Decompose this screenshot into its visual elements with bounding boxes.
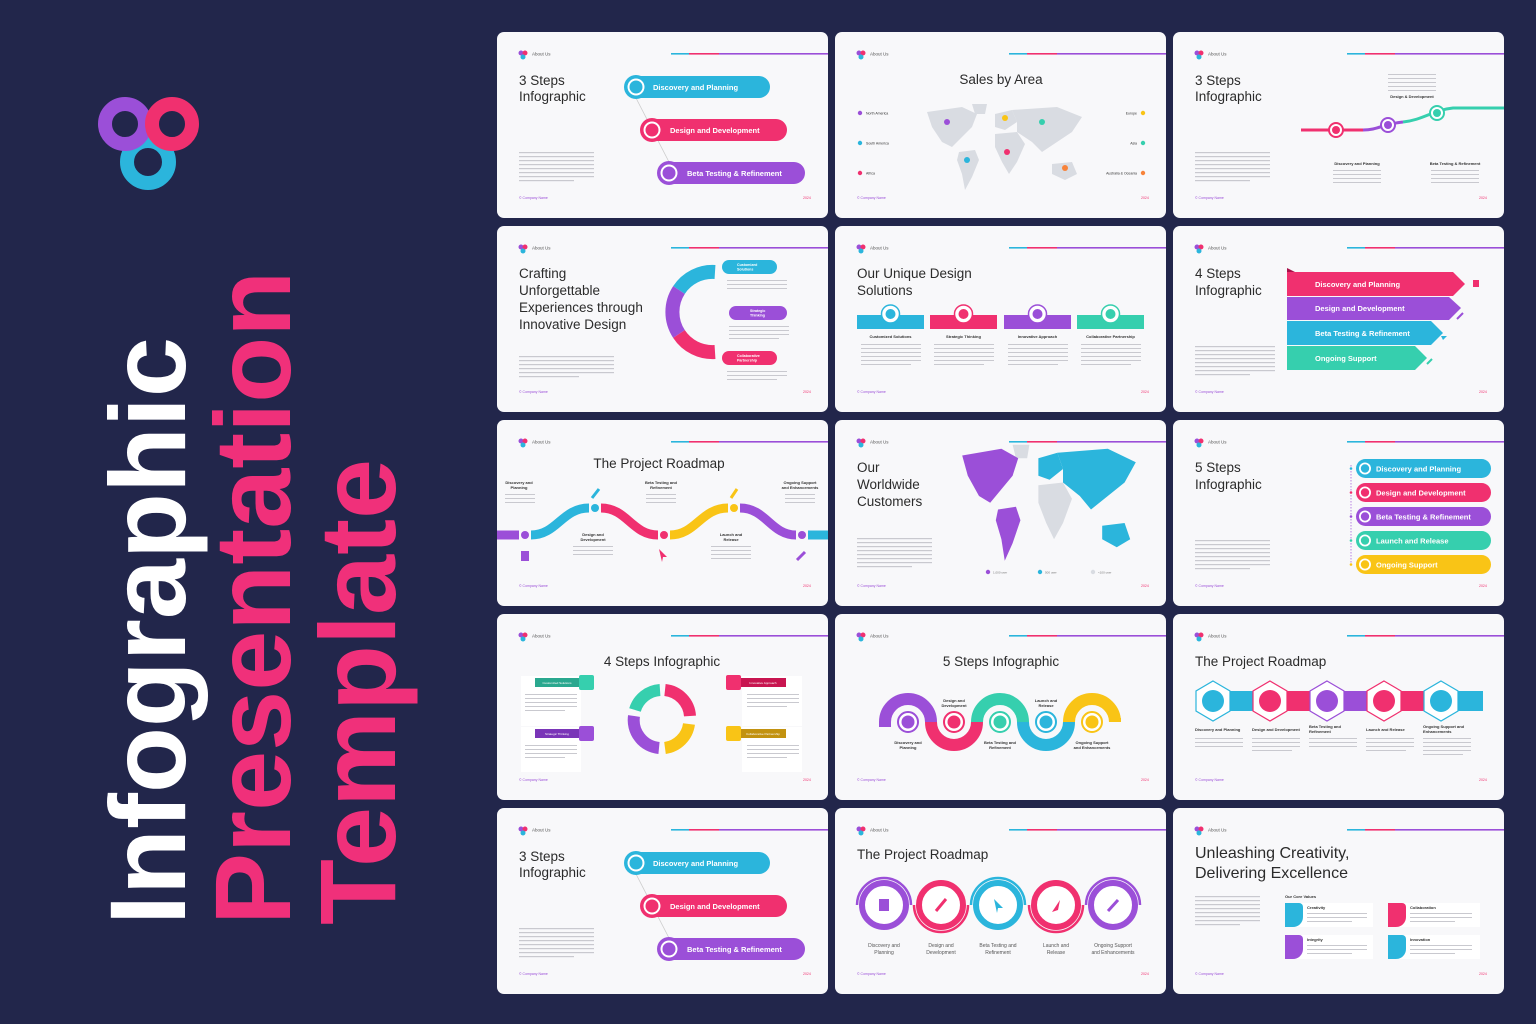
slide: 3 steps (row1): About Us	[532, 52, 551, 56]
slide: 4 steps donut	[497, 614, 828, 800]
slide: crafting half ring: Partnership	[737, 358, 758, 362]
slide: 3 steps (row5): Design and Development	[670, 902, 760, 911]
slide: unleashing creativity: Our Core Values	[1285, 894, 1317, 899]
slide: 5 steps pills: Beta Testing & Refinement	[1376, 512, 1471, 522]
slide: roadmap circles: Release	[1047, 950, 1065, 956]
slide: unleashing creativity: Innovation	[1410, 937, 1431, 942]
slide: crafting half ring: Innovative Design	[519, 317, 626, 332]
slide: unleashing creativity: Unleashing Creativity,	[1195, 845, 1349, 862]
logo	[105, 104, 192, 183]
slide: roadmap circles	[835, 808, 1166, 994]
slide: unleashing creativity: Delivering Excellence	[1195, 865, 1348, 882]
slide: roadmap hexagons: About Us	[1208, 634, 1227, 638]
slide: unique design solutions: © Company Name	[857, 390, 886, 394]
slide: 5 steps arcs: Ongoing Support	[1076, 740, 1109, 745]
slide: 5 steps pills: Infographic	[1195, 477, 1262, 492]
slide: 3 steps wave: Design & Development	[1390, 94, 1434, 99]
slide: unique design solutions: Solutions	[857, 283, 913, 298]
slide: 5 steps pills: © Company Name	[1195, 584, 1224, 588]
slide: project roadmap wave: Design and	[582, 532, 604, 537]
slide: 3 steps (row1): Infographic	[519, 89, 586, 104]
slide: 5 steps pills: Design and Development	[1376, 488, 1466, 498]
slide: sales by area: Asia	[1130, 142, 1137, 146]
slide: project roadmap wave: © Company Name	[519, 584, 548, 588]
slide: 3 steps (row1): Discovery and Planning	[653, 83, 738, 92]
slide: unleashing creativity: Collaboration	[1410, 905, 1436, 910]
slide: 3 steps wave: About Us	[1208, 52, 1227, 56]
slide: 5 steps arcs: About Us	[870, 634, 889, 638]
slide: sales by area: Australia & Oceania	[1106, 172, 1137, 176]
slide: 3 steps (row1)	[497, 32, 828, 218]
slide: 3 steps (row1): Beta Testing & Refinement	[687, 169, 782, 178]
title: Template: Template	[297, 459, 418, 925]
slide: project roadmap wave	[497, 420, 828, 606]
slide: 4 steps donut: About Us	[532, 634, 551, 638]
slide: 5 steps arcs: Beta Testing and	[984, 740, 1017, 745]
slide: 3 steps (row5)	[497, 808, 828, 994]
slide: crafting half ring	[497, 226, 828, 412]
slide: roadmap circles: Launch and	[1043, 943, 1069, 949]
slide: roadmap hexagons: 2024	[1479, 778, 1487, 782]
slide: 5 steps arcs: Development	[941, 703, 967, 708]
slide: roadmap circles: © Company Name	[857, 972, 886, 976]
slide: 4 steps arrows: Design and Development	[1315, 304, 1405, 313]
slide: crafting half ring: Customized	[737, 263, 757, 267]
slide: 4 steps donut: 2024	[803, 778, 811, 782]
slide: 3 steps (row5): Infographic	[519, 865, 586, 880]
slide: unique design solutions: Collaborative Partnership	[1086, 334, 1135, 339]
slide: roadmap circles: Beta Testing and	[979, 943, 1017, 949]
slide: 5 steps pills	[1173, 420, 1504, 606]
slide: project roadmap wave: Ongoing Support	[784, 480, 817, 485]
slide: project roadmap wave: Release	[723, 537, 739, 542]
slide: crafting half ring: Strategic	[750, 309, 765, 313]
slide: crafting half ring: 2024	[803, 390, 811, 394]
title: Infographic: Infographic	[87, 337, 208, 925]
slide: worldwide customers: Our	[857, 460, 880, 475]
slide: 5 steps arcs	[835, 614, 1166, 800]
slide: unleashing creativity: Creativity	[1307, 905, 1326, 910]
slide: 4 steps arrows: About Us	[1208, 246, 1227, 250]
slide: roadmap circles: Design and	[928, 943, 954, 949]
slide: project roadmap wave: Planning	[511, 485, 528, 490]
slide: 4 steps donut: Strategic Thinking	[545, 732, 569, 736]
slide: project roadmap wave: Launch and	[720, 532, 743, 537]
slide: roadmap hexagons: The Project Roadmap	[1195, 654, 1326, 669]
slide: sales by area: About Us	[870, 52, 889, 56]
left title block	[87, 97, 418, 925]
slide: roadmap circles: Development	[926, 950, 956, 956]
slide: unique design solutions	[835, 226, 1166, 412]
slide: project roadmap wave: Discovery and	[505, 480, 533, 485]
slide: project roadmap wave: Beta Testing and	[645, 480, 678, 485]
slide: 5 steps pills: 2024	[1479, 584, 1487, 588]
slide: roadmap hexagons: Discovery and Planning	[1195, 727, 1241, 732]
slide: crafting half ring: Collaborative	[737, 354, 760, 358]
slide: crafting half ring: Experiences through	[519, 300, 643, 315]
slide: sales by area: 2024	[1141, 196, 1149, 200]
slide: roadmap hexagons: Refinement	[1309, 729, 1331, 734]
slide: crafting half ring: About Us	[532, 246, 551, 250]
slide: 3 steps (row5): 2024	[803, 972, 811, 976]
slide: 3 steps (row1): © Company Name	[519, 196, 548, 200]
slide: 4 steps arrows: Infographic	[1195, 283, 1262, 298]
slide: worldwide customers: <100 user	[1098, 570, 1111, 574]
slide: unleashing creativity: 2024	[1479, 972, 1487, 976]
slide: roadmap circles: and Enhancements	[1091, 950, 1135, 956]
slide: project roadmap wave: 2024	[803, 584, 811, 588]
slide: 4 steps arrows: Discovery and Planning	[1315, 280, 1400, 289]
slide: roadmap hexagons: Beta Testing and	[1309, 724, 1341, 729]
slide: crafting half ring: Crafting	[519, 266, 566, 281]
slide: project roadmap wave: About Us	[532, 440, 551, 444]
slide: 4 steps arrows: Ongoing Support	[1315, 354, 1377, 363]
slide: crafting half ring: © Company Name	[519, 390, 548, 394]
slide: 3 steps (row5): Beta Testing & Refinement	[687, 945, 782, 954]
slide: 5 steps arcs: Planning	[900, 745, 917, 750]
slide: worldwide customers: Worldwide	[857, 477, 920, 492]
slide: roadmap circles: 2024	[1141, 972, 1149, 976]
slide: 5 steps pills: Ongoing Support	[1376, 560, 1438, 570]
slide: 3 steps (row5): © Company Name	[519, 972, 548, 976]
slide: 3 steps wave: Infographic	[1195, 89, 1262, 104]
slide: unleashing creativity: Integrity	[1307, 937, 1324, 942]
slide: project roadmap wave: Development	[580, 537, 606, 542]
slide: crafting half ring: Thinking	[750, 314, 765, 318]
slide: 4 steps arrows: Beta Testing & Refinement	[1315, 329, 1410, 338]
slide: unleashing creativity: © Company Name	[1195, 972, 1224, 976]
slide: roadmap circles: Ongoing Support	[1094, 943, 1133, 949]
slide: roadmap hexagons: Design and Development	[1252, 727, 1300, 732]
slide: unique design solutions: About Us	[870, 246, 889, 250]
slide: 3 steps (row5): 3 Steps	[519, 849, 565, 864]
slide: 5 steps arcs: Discovery and	[894, 740, 922, 745]
slide: unique design solutions: Innovative Approach	[1018, 334, 1058, 339]
slide: 4 steps arrows: © Company Name	[1195, 390, 1224, 394]
slide: 3 steps wave: Discovery and Planning	[1334, 161, 1380, 166]
slide: sales by area: © Company Name	[857, 196, 886, 200]
slide: roadmap circles: Planning	[874, 950, 894, 956]
slide: 5 steps pills: About Us	[1208, 440, 1227, 444]
slide: project roadmap wave: and Enhancements	[782, 485, 819, 490]
slide: roadmap hexagons	[1173, 614, 1504, 800]
slide: 5 steps pills: 5 Steps	[1195, 460, 1241, 475]
slide: roadmap hexagons: Launch and Release	[1366, 727, 1405, 732]
slide: 5 steps arcs: Design and	[943, 698, 965, 703]
slide: roadmap circles: Discovery and	[868, 943, 900, 949]
slide: crafting half ring: Unforgettable	[519, 283, 600, 298]
slide: worldwide customers: 1,000 user	[993, 570, 1007, 574]
slide: 5 steps arcs: 2024	[1141, 778, 1149, 782]
slide: 5 steps arcs: and Enhancements	[1074, 745, 1111, 750]
slide: sales by area: South America	[866, 142, 889, 146]
slide: 3 steps (row5): Discovery and Planning	[653, 859, 738, 868]
slide: 4 steps arrows: 2024	[1479, 390, 1487, 394]
slide: 3 steps wave: 2024	[1479, 196, 1487, 200]
slide: 5 steps arcs: Refinement	[989, 745, 1012, 750]
slide: sales by area: Africa	[866, 172, 875, 176]
title: Presentation: Presentation	[192, 271, 313, 925]
slide: 3 steps (row5): About Us	[532, 828, 551, 832]
slide: 4 steps donut: 4 Steps Infographic	[604, 654, 720, 669]
slide: worldwide customers: 2024	[1141, 584, 1149, 588]
slide: project roadmap wave: The Project Roadmap	[593, 456, 725, 471]
slide: 3 steps wave: 3 Steps	[1195, 73, 1241, 88]
slide: roadmap hexagons: Enhancements	[1423, 729, 1452, 734]
slide: roadmap circles: Refinement	[985, 950, 1011, 956]
slide: 5 steps arcs: 5 Steps Infographic	[943, 654, 1059, 669]
slide: roadmap hexagons: Ongoing Support and	[1423, 724, 1465, 729]
slide: unique design solutions: Customized Solutions	[870, 334, 912, 339]
slide: worldwide customers	[835, 420, 1166, 606]
slide: sales by area: Europe	[1126, 112, 1137, 116]
slide: sales by area	[835, 32, 1166, 218]
slide: 5 steps arcs: Launch and	[1035, 698, 1058, 703]
slide: 3 steps wave: Beta Testing & Refinement	[1430, 161, 1481, 166]
slide: roadmap circles: About Us	[870, 828, 889, 832]
slide: unique design solutions: Our Unique Design	[857, 266, 972, 281]
slide: sales by area: North America	[866, 112, 888, 116]
slide: 4 steps arrows	[1173, 226, 1504, 412]
slide: 3 steps (row1): 2024	[803, 196, 811, 200]
slide: crafting half ring: Solutions	[737, 268, 753, 272]
slide: worldwide customers: Customers	[857, 494, 923, 509]
slide: 3 steps (row1): 3 Steps	[519, 73, 565, 88]
slide: 4 steps arrows: 4 Steps	[1195, 266, 1241, 281]
slide: 4 steps donut: Collaborative Partnership	[746, 732, 780, 736]
slide: 4 steps donut: Customized Solutions	[542, 681, 572, 685]
slide: unleashing creativity: About Us	[1208, 828, 1227, 832]
slide: roadmap circles: The Project Roadmap	[857, 847, 988, 862]
slide: sales by area: Sales by Area	[959, 72, 1043, 87]
slide: 3 steps (row1): Design and Development	[670, 126, 760, 135]
slide: 3 steps wave: © Company Name	[1195, 196, 1224, 200]
slide: 3 steps wave	[1173, 32, 1504, 218]
slide: worldwide customers: 500 user	[1045, 570, 1057, 574]
slide: 5 steps arcs: © Company Name	[857, 778, 886, 782]
slide: 5 steps pills: Discovery and Planning	[1376, 464, 1461, 474]
slide: project roadmap wave: Refinement	[650, 485, 673, 490]
slide: 5 steps pills: Launch and Release	[1376, 536, 1449, 546]
slide: 4 steps donut: Innovative Approach	[749, 681, 777, 685]
slide: roadmap hexagons: © Company Name	[1195, 778, 1224, 782]
slide: 5 steps arcs: Release	[1038, 703, 1054, 708]
slide: worldwide customers: © Company Name	[857, 584, 886, 588]
slide: unique design solutions: Strategic Thinking	[946, 334, 981, 339]
slide: worldwide customers: About Us	[870, 440, 889, 444]
slide: unleashing creativity	[1173, 808, 1504, 994]
slide: 4 steps donut: © Company Name	[519, 778, 548, 782]
slide: unique design solutions: 2024	[1141, 390, 1149, 394]
